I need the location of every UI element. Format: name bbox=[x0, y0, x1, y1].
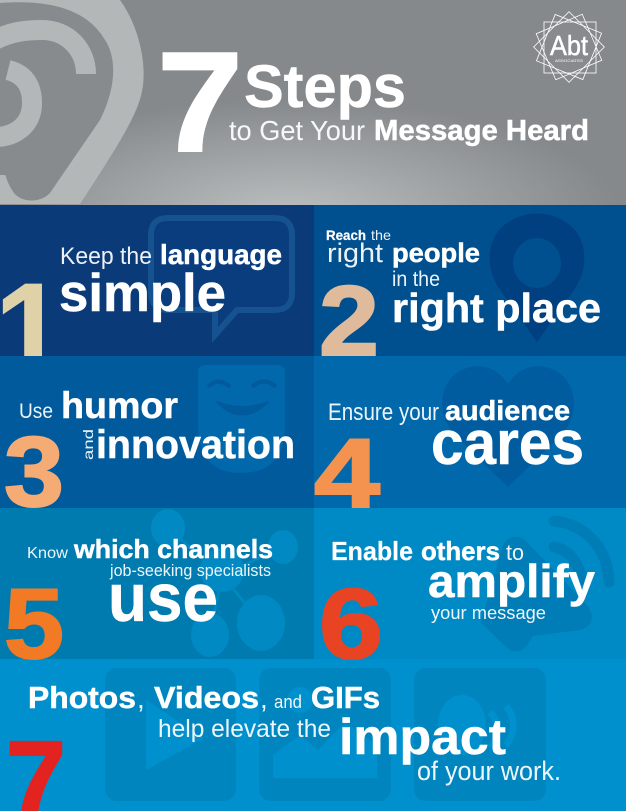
text: keep the language bbox=[60, 239, 282, 270]
panel: step 1 simple language bbox=[0, 205, 314, 356]
heading: photos videos gifs: GIFs bbox=[311, 680, 380, 715]
text: right place: right place bbox=[392, 285, 601, 331]
text: use humor: Use bbox=[19, 400, 53, 423]
panel: header bbox=[0, 0, 626, 205]
text: ensure your audience: Ensure your bbox=[328, 399, 439, 426]
text: right people: right bbox=[327, 238, 384, 268]
text: in the: in the bbox=[392, 268, 440, 291]
icon: video tile bbox=[105, 668, 236, 801]
title: big 7: 7 bbox=[157, 23, 243, 182]
heading: photos videos gifs bbox=[28, 680, 380, 715]
heading: photos videos gifs: Videos bbox=[154, 680, 259, 715]
text: ensure your audience: audience bbox=[445, 395, 570, 426]
title: steps: Steps bbox=[244, 53, 406, 120]
subtitle: to get your message heard bbox=[229, 115, 589, 147]
number 2: 2 bbox=[319, 265, 379, 376]
text: enable others to: others bbox=[421, 536, 500, 566]
text: your message: your message bbox=[431, 603, 546, 623]
text: reach the: the bbox=[371, 227, 391, 243]
panel: step 5 channels bbox=[0, 508, 314, 679]
text: enable others to: Enable bbox=[331, 536, 413, 566]
text: keep the language: Keep the bbox=[60, 243, 152, 270]
icon: speech bubble bbox=[151, 218, 292, 335]
number 4: 4 bbox=[314, 418, 380, 529]
icon: megaphone bbox=[483, 521, 609, 650]
panel: step 2 right people right place bbox=[314, 205, 626, 376]
panel: step 7 photos videos gifs bbox=[10, 668, 559, 811]
logo: Abt Associates: Abt bbox=[550, 30, 588, 61]
heading: photos videos gifs: , bbox=[260, 683, 268, 714]
text: innovation: innovation bbox=[96, 423, 295, 467]
icon: heart bbox=[442, 366, 574, 487]
text: and (rotated): and bbox=[80, 429, 96, 460]
logo: Abt Associates: ASSOCIATES bbox=[555, 59, 584, 63]
text: job-seeking specialists: job-seeking specialists bbox=[109, 561, 271, 580]
text: ensure your audience bbox=[328, 395, 570, 426]
icon: ear bbox=[0, 0, 144, 204]
subtitle: to get your message heard: Message Heard bbox=[374, 115, 589, 147]
subtitle: to get your message heard: to Get Your bbox=[229, 115, 365, 146]
number 3: 3 bbox=[4, 416, 64, 527]
icon: comedy mask bbox=[198, 365, 285, 473]
text: enable others to bbox=[331, 536, 524, 566]
icon: share network bbox=[151, 509, 298, 657]
text: keep the language: language bbox=[160, 239, 282, 270]
icon: map pin bbox=[490, 214, 584, 342]
text: help elevate the impact of your work: of your work. bbox=[417, 756, 561, 786]
panel: step 3 humor and innovation bbox=[0, 356, 314, 527]
text: help elevate the impact of your work: impact bbox=[339, 709, 506, 765]
icon: audio tile bbox=[414, 668, 546, 801]
heading: photos videos gifs: Photos bbox=[28, 680, 136, 715]
panel: step 6 amplify bbox=[314, 508, 626, 679]
icon: image tile bbox=[259, 668, 391, 801]
text: use humor: humor bbox=[61, 385, 178, 426]
text: know which channels: which channels bbox=[73, 534, 273, 564]
logo: Abt Associates bbox=[534, 12, 604, 82]
text: reach the bbox=[326, 227, 391, 243]
text: right people bbox=[327, 238, 480, 268]
text: help elevate the impact of your work: help elevate the bbox=[158, 715, 331, 743]
text: enable others to: to bbox=[506, 540, 524, 565]
text: reach the: Reach bbox=[326, 227, 366, 243]
panel: step 4 audience cares bbox=[314, 356, 626, 508]
text: know which channels: Know bbox=[27, 545, 68, 562]
text: use: use bbox=[108, 560, 218, 636]
text: help elevate the impact of your work bbox=[158, 709, 561, 786]
text: amplify: amplify bbox=[428, 555, 595, 607]
number 5: 5 bbox=[4, 568, 64, 679]
text: right people: people bbox=[392, 238, 480, 268]
number 6: 6 bbox=[319, 568, 383, 679]
text: simple: simple bbox=[59, 264, 226, 323]
heading: photos videos gifs: and bbox=[274, 692, 302, 712]
text: cares: cares bbox=[431, 409, 584, 478]
heading: photos videos gifs: , bbox=[137, 683, 145, 714]
